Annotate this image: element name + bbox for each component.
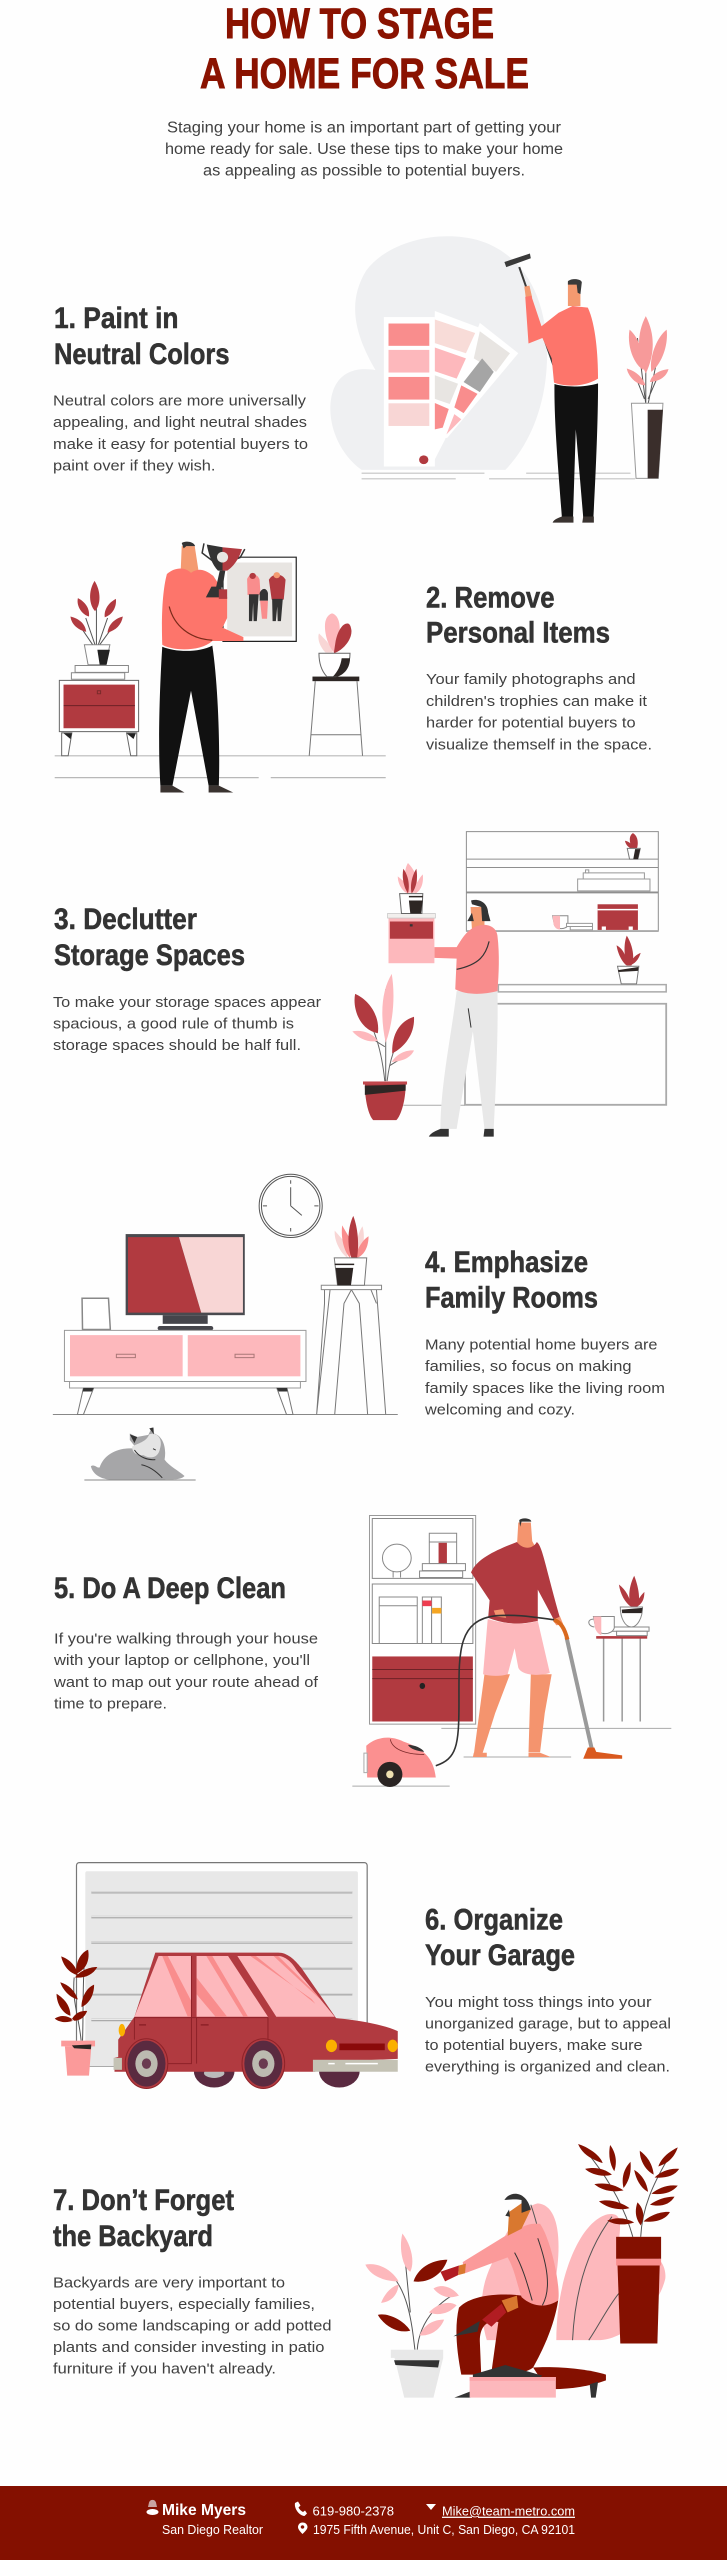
potted plant [55,1950,97,2076]
panel: step 5 text: If you're walking through your house [54,1630,318,1647]
panel: step 7 text: the Backyard [53,2220,213,2253]
panel: step 5 text: want to map out your route ahead of [53,1674,319,1691]
panel: step 6 text: 6. Organize [425,1904,563,1937]
panel: step 7 text [53,2184,332,2378]
portrait frame with family [223,557,296,641]
plant on nightstand [70,581,123,665]
woman carrying box [429,900,499,1137]
panel: step 2 text: Your family photographs and [426,671,636,688]
icon: phone [295,2502,307,2516]
colour swatch fan [384,311,518,467]
panel: step 4 text [424,1246,665,1418]
man holding trophy [159,542,243,793]
floor lines [53,1414,398,1480]
panel: step 1 text: make it easy for potential buyers to [53,436,308,453]
illustration: gardener with plants [365,2144,679,2398]
panel: step 2 text: harder for potential buyers to [426,714,636,732]
panel: step 7 text: Backyards are very important to [53,2274,285,2292]
panel: step 4 text: Family Rooms [425,1281,598,1314]
floor lines [352,1728,671,1786]
title [200,0,529,98]
potted plant [627,316,669,478]
bench [533,2367,606,2398]
icon: email [426,2504,436,2510]
panel: step 7 text: plants and consider investing in patio [53,2339,324,2356]
address: 1975 Fifth Avenue, Unit C, San Diego, CA 92101 [313,2523,575,2537]
panel: step 2 text: 2. Remove [426,581,554,614]
panel: step 2 text: children's trophies can make it [426,693,648,710]
panel: step 2 text: Personal Items [426,616,610,650]
panel: step 1 text [53,302,308,475]
box with plant on top [388,863,435,963]
email address: Mike@team-metro.com [442,2505,575,2519]
panel: step 5 text: with your laptop or cellphone, you'll [53,1652,310,1669]
intro text: as appealing as possible to potential buyers. [203,162,525,180]
panel: step 4 text: welcoming and cozy. [424,1402,575,1418]
intro text: Staging your home is an important part of getting your [167,120,561,136]
media console [64,1330,306,1414]
large potted plant [352,974,414,1120]
panel: step 3 text: To make your storage spaces appear [53,994,321,1011]
floor lines [362,473,635,479]
man with paint roller [504,254,598,523]
panel: step 1 text: Neutral Colors [54,338,230,371]
panel: step 6 text: Your Garage [425,1939,575,1972]
panel: step 6 text: to potential buyers, make sure [425,2037,643,2054]
panel: step 7 text: 7. Don’t Forget [53,2184,234,2217]
shelves and cabinet [403,832,666,1105]
bookshelf [369,1516,476,1724]
panel: step 5 text [53,1572,319,1712]
panel: step 1 text: appealing, and light neutral shades [53,414,307,431]
panel: step 3 text: spacious, a good rule of thumb is [53,1016,294,1033]
floor lines [55,756,386,778]
icon: location pin [298,2522,308,2534]
title: A HOME FOR SALE [200,50,529,98]
phone number: 619-980-2378 [312,2505,394,2519]
intro text [165,120,563,180]
picture frame [82,1298,110,1329]
car [114,1953,398,2088]
background blob [330,236,547,470]
intro text: home ready for sale. Use these tips to make your home [165,141,563,158]
panel: step 1 text: 1. Paint in [54,302,178,335]
illustration: car in garage [55,1863,398,2088]
pink potted plant [365,2233,459,2398]
panel: step 4 text: 4. Emphasize [425,1246,588,1279]
garage door [76,1863,367,2066]
panel: step 5 text: time to prepare. [54,1696,167,1712]
panel: step 4 text: Many potential home buyers are [425,1336,658,1353]
panel: step 2 text [426,581,652,753]
shelf items [553,833,650,984]
sleeping cat [91,1427,185,1480]
panel: step 2 text: visualize themself in the space. [426,736,652,753]
tall maroon planter with plant [578,2144,679,2344]
wall clock [259,1174,322,1238]
illustration: man vacuuming [352,1516,671,1787]
illustration: painter with colour swatches [330,236,669,523]
title: HOW TO STAGE [225,0,494,48]
panel: step 6 text: everything is organized and clean. [425,2059,670,2076]
panel: step 6 text: unorganized garage, but to appeal [425,2016,671,2033]
panel: step 1 text: paint over if they wish. [53,458,216,475]
vacuum cleaner [364,1615,622,1787]
kneeling gardener [440,2194,559,2398]
panel: step 7 text: so do some landscaping or add potted [53,2318,332,2335]
contact role: San Diego Realtor [162,2523,263,2537]
trophy [202,543,245,599]
man with vacuum [471,1518,563,1757]
side table with plant [317,1216,386,1414]
stool with plant [309,613,363,756]
illustration: living room [53,1174,398,1480]
television [126,1234,245,1330]
background pink foliage [482,2203,665,2340]
contact name: Mike Myers [162,2502,246,2519]
panel: step 1 text: Neutral colors are more universally [53,393,307,410]
panel: step 6 text [425,1904,671,2076]
panel: step 3 text: 3. Declutter [54,903,197,936]
illustration: woman decluttering shelves [352,832,666,1137]
panel: step 4 text: families, so focus on making [425,1358,632,1375]
panel: step 6 text: You might toss things into your [425,1994,652,2011]
side table with cup and plant [589,1576,649,1721]
panel: step 5 text: 5. Do A Deep Clean [54,1572,286,1605]
panel: step 3 text: storage spaces should be half full. [53,1037,301,1054]
foliage veins [531,2205,619,2340]
panel: step 3 text: Storage Spaces [54,939,245,972]
illustration: man with trophy and portrait [55,542,386,793]
panel: step 7 text: furniture if you haven't already. [53,2361,276,2378]
nightstand [59,665,139,756]
footer bar [0,2486,727,2560]
panel: step 3 text [53,903,321,1054]
panel: step 4 text: family spaces like the living room [425,1380,665,1397]
panel: step 7 text: potential buyers, especially families, [53,2296,315,2313]
icon: realtor [146,2500,158,2515]
